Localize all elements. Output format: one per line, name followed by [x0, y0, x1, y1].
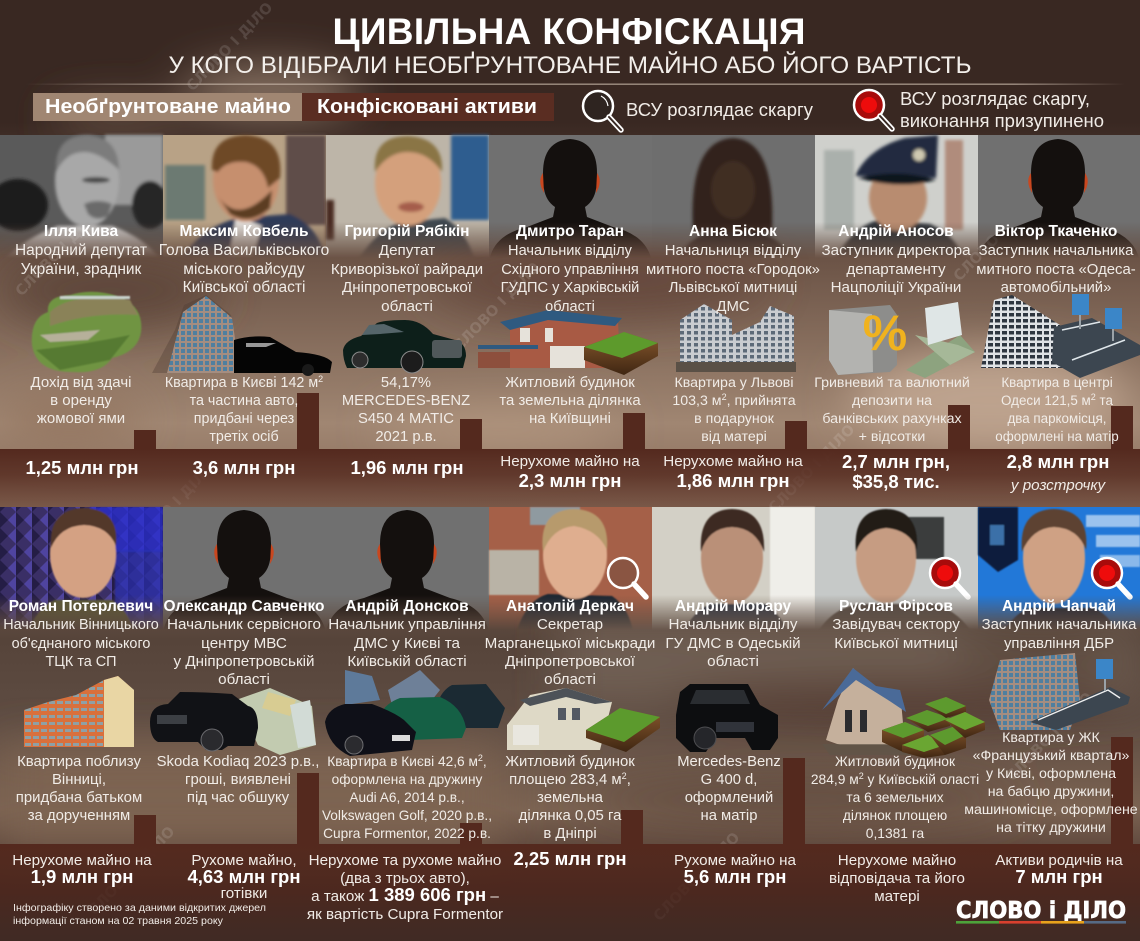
amount: Donskov: Нерухоме та рухоме майно: [309, 852, 501, 869]
watermarks: СЛОВО І ДІЛО: [951, 190, 1043, 285]
description: Derkach: Житловий будинок: [505, 754, 635, 770]
card text: Poterlevych: об'єднаного міського: [12, 636, 150, 652]
card text: Chapchai: [982, 598, 1137, 652]
description: Firsov: 0,1381 га: [866, 826, 925, 841]
photo: Andrii Chapchai: [978, 507, 1140, 637]
description: Tkachenko: та: [1096, 393, 1113, 408]
row 1 people: [15, 223, 1136, 315]
description: Kovbel: Квартира в Києві 142 м: [165, 375, 318, 391]
card text: Taran: Східного управління: [501, 262, 639, 278]
card text: Kyva: [15, 223, 147, 278]
description: Kovbel: придбані через: [194, 411, 295, 427]
asset: French Quarter apartment and parking: [989, 653, 1130, 730]
amount: Firsov: Нерухоме майно: [838, 852, 956, 869]
description: Savchenko: гроші, виявлені: [185, 772, 291, 788]
asset: Lviv apartment complex: [676, 304, 796, 372]
card text: Savchenko: області: [218, 671, 270, 688]
asset: Skoda Kodiaq and cash: [150, 688, 316, 755]
land plots: [882, 697, 985, 758]
legend: Supreme Court reviewing, enforcement suspended: виконання призупинено: [900, 111, 1104, 131]
legend: colour keys: [33, 93, 554, 121]
card text: Savchenko: центру МВС: [201, 635, 287, 652]
footnote: [13, 902, 266, 927]
amount: Morarui: 5,6 млн грн: [684, 866, 786, 887]
watermarks: СЛОВО І ДІЛО: [451, 260, 543, 355]
amount: Poterlevych: 1,9 млн грн: [31, 866, 133, 887]
description: Tkachenko: оформлені на матір: [995, 429, 1119, 444]
card text: Poterlevych: [3, 598, 159, 670]
card text: Savchenko: Олександр Савченко: [163, 598, 325, 615]
description: Tkachenko: [995, 375, 1119, 444]
description: Kyva: [31, 374, 131, 427]
amount: Morarui: Рухоме майно на: [674, 852, 797, 869]
card text: Derkach: Марганецької міськради: [485, 635, 655, 652]
description: Taran: на Київщині: [529, 411, 611, 427]
amount: Taran: Нерухоме майно на: [500, 453, 640, 470]
card text: Riabikin: області: [381, 298, 433, 315]
description: Firsov: 2: [859, 771, 864, 781]
card text: Bisiuk: Анна Бісюк: [689, 223, 777, 240]
card text: Anosov: департаменту: [846, 261, 946, 278]
description: Derkach: 2: [622, 771, 627, 781]
description: Firsov: ділянок площею: [843, 808, 947, 823]
card text: Kyva: Ілля Кива: [44, 223, 119, 240]
description: Tkachenko: Одеси 121,5 м: [1001, 393, 1091, 408]
photo: Viktor Tkachenko (silhouette): [977, 135, 1140, 265]
logo: СЛОВО і ДІЛО: [956, 898, 1126, 924]
watermarks: СЛОВО І ДІЛО: [766, 422, 858, 517]
description: Poterlevych: за дорученням: [28, 808, 130, 824]
card text: Anosov: Заступник директора: [821, 242, 971, 259]
asset: Odesa apartment and parking: [981, 294, 1140, 378]
description: Donskov: 2: [478, 753, 483, 763]
description: Derkach: земельна: [537, 790, 604, 806]
amount: Kovbel: 3,6 млн грн: [193, 457, 295, 478]
description: Tkachenko: 2: [1091, 392, 1096, 402]
row 1 amounts: [25, 451, 1109, 494]
amount: Savchenko: [187, 852, 301, 902]
asset: Vinnytsia apartment: [24, 676, 134, 747]
legend key: unjustified property: Необґрунтоване майно: [45, 96, 291, 118]
description: Poterlevych: Квартира поблизу: [17, 754, 141, 770]
card text: Derkach: [485, 598, 655, 688]
amount: Bisiuk: Нерухоме майно на: [663, 453, 803, 470]
icon: red magnifier badge: [1092, 558, 1130, 597]
description: Anosov: банківських рахунках: [822, 411, 962, 427]
description: Anosov: + відсотки: [859, 429, 925, 445]
amount: Donskov: як вартість Cupra Formentor: [307, 906, 503, 923]
amount: Donskov: [307, 852, 503, 923]
description: Chapchai: на бабцю дружини,: [988, 784, 1114, 800]
description: Donskov: [322, 753, 492, 841]
amount: Donskov: а також 1 389 606 грн –: [311, 884, 499, 905]
card text: Savchenko: у Дніпропетровській: [174, 653, 314, 670]
card text: Taran: Начальник відділу: [508, 243, 633, 259]
card text: Kovbel: Голова Васильківського: [159, 242, 329, 259]
description: Firsov: 284,9 м: [811, 772, 859, 787]
amount: Bisiuk: [663, 453, 803, 491]
description: Donskov: оформлена на дружину: [332, 772, 483, 787]
card text: Riabikin: Депутат: [379, 242, 435, 259]
band row 2 with stems: [0, 737, 1140, 941]
amount: Savchenko: готівки: [221, 885, 267, 902]
legend key: confiscated assets: Конфісковані активи: [317, 96, 537, 118]
photo: Andrii Morarui: [652, 507, 815, 637]
card text: Savchenko: Начальник сервісного: [167, 616, 321, 633]
card text: Kovbel: Максим Ковбель: [179, 223, 309, 240]
description: Kovbel: третіх осіб: [209, 429, 279, 445]
card text: Tkachenko: Заступник начальника: [979, 243, 1134, 259]
description: Bisiuk: [672, 375, 796, 445]
card text: Donskov: Начальник управління: [328, 616, 486, 633]
card text: Tkachenko: митного поста «Одеса-: [976, 262, 1136, 278]
legend: Supreme Court reviewing, enforcement suspended: ВСУ розглядає скаргу,: [900, 89, 1090, 109]
photo: Hryhorii Riabikin: [326, 135, 489, 265]
card text: Kyva: України, зрадник: [21, 261, 142, 278]
band row 1 with stems: [0, 393, 1140, 507]
photo: Andrii Anosov: [815, 135, 978, 265]
description: Kyva: в оренду: [50, 392, 112, 409]
card text: Derkach: Дніпропетровської: [505, 653, 636, 670]
description: Kyva: Дохід від здачі: [31, 374, 131, 391]
description: Kovbel: та частина авто,: [190, 393, 298, 409]
description: Morarui: [677, 754, 781, 824]
photo: Dmytro Taran (silhouette): [489, 135, 652, 265]
card text: Taran: Дмитро Таран: [516, 223, 624, 240]
description: Anosov: депозити на: [852, 393, 932, 409]
row 2 photos: [0, 507, 1140, 637]
legend key: unjustified property: [33, 93, 302, 121]
description: Poterlevych: Вінниці,: [52, 772, 106, 788]
asset: allotment land: [32, 292, 141, 372]
description: Donskov: Квартира в Києві 42,6 м: [327, 754, 478, 769]
card text: Riabikin: Дніпропетровської: [342, 279, 473, 296]
amount: Savchenko: Рухоме майно,: [191, 852, 297, 869]
description: Kovbel: 2: [318, 374, 323, 384]
card text: Chapchai: управління ДБР: [1004, 636, 1114, 652]
amount: Kyva: 1,25 млн грн: [25, 457, 139, 478]
amount: Tkachenko: 2,8 млн грн: [1007, 451, 1109, 472]
photo: Anna Bisiuk: [652, 135, 815, 265]
description: Poterlevych: [16, 754, 142, 824]
amount: Taran: 2,3 млн грн: [519, 470, 621, 491]
asset: Dnipro house and land: [507, 688, 660, 752]
description: Taran: Житловий будинок: [505, 375, 635, 391]
icon: magnifier white: [583, 91, 621, 130]
description: Morarui: на матір: [701, 808, 757, 824]
amount: Chapchai: [995, 852, 1123, 887]
photo: Maksym Kovbel: [163, 135, 326, 265]
asset: Kyiv apartment and three cars: [325, 670, 505, 756]
description: Taran: [499, 375, 641, 427]
card text: Derkach: Секретар: [537, 616, 603, 633]
card text: Donskov: ДМС у Києві та: [354, 635, 461, 652]
description: Donskov: ,: [483, 754, 487, 769]
description: Chapchai: на тітку дружини: [996, 820, 1106, 836]
card text: Donskov: Андрій Донсков: [345, 598, 469, 615]
amount: Tkachenko: у розстрочку: [1010, 477, 1106, 494]
asset: Kyiv apartment and car: [152, 295, 332, 376]
watermarks: СЛОВО І ДІЛО: [126, 460, 218, 555]
card text: Taran: області: [545, 299, 595, 315]
asset: safe, percent sign and money: %: [863, 305, 907, 361]
amount: Morarui: [674, 852, 797, 887]
amount: Firsov: [829, 852, 965, 905]
description: Tkachenko: Квартира в центрі: [1001, 375, 1113, 390]
icon: red magnifier badge: [930, 558, 968, 597]
watermarks: СЛОВО І ДІЛО: [13, 205, 105, 300]
description: Bisiuk: 103,3 м: [672, 393, 722, 409]
legend: Supreme Court reviewing: [583, 91, 813, 130]
asset: safe, percent sign and money: [829, 302, 975, 378]
description: Chapchai: [964, 730, 1138, 836]
card text: Poterlevych: Начальник Вінницького: [3, 617, 159, 633]
card text: Anosov: [821, 223, 971, 296]
legend key: confiscated assets: [302, 93, 554, 121]
description: Poterlevych: придбана батьком: [16, 790, 142, 806]
description: Morarui: G 400 d,: [701, 772, 757, 788]
card text: Anosov: Нацполіції України: [831, 279, 961, 296]
asset: Mercedes S450: [343, 320, 466, 373]
amount: Poterlevych: [12, 852, 152, 887]
watermarks: СЛОВО І ДІЛО: [1004, 690, 1096, 785]
description: Chapchai: у Києві, оформлена: [986, 766, 1116, 782]
description: Derkach: площею 283,4 м: [509, 772, 622, 788]
row 2 asset descriptions: [16, 730, 1138, 842]
description: Firsov: [811, 754, 979, 841]
amount: Firsov: матері: [874, 888, 920, 905]
amount: Poterlevych: Нерухоме майно на: [12, 852, 152, 869]
legend: Supreme Court reviewing, enforcement suspended: [854, 89, 1104, 131]
card text: Tkachenko: Віктор Ткаченко: [995, 223, 1117, 240]
footnote: інформації станом на 02 травня 2025 року: [13, 915, 224, 927]
card text: Poterlevych: ТЦК та СП: [46, 654, 116, 670]
description: Riabikin: 54,17%: [381, 375, 431, 391]
card text: Kovbel: [159, 223, 329, 296]
description: Riabikin: S450 4 MATIC: [358, 411, 454, 427]
card text: Anosov: Андрій Аносов: [838, 223, 954, 240]
card text: Bisiuk: Львівської митниці: [669, 280, 797, 296]
icon: magnifier red: [854, 90, 892, 129]
description: Chapchai: «Французький квартал»: [973, 748, 1130, 764]
card text: Chapchai: Андрій Чапчай: [1002, 598, 1116, 615]
description: Morarui: оформлений: [685, 790, 773, 806]
card text: Morarui: [665, 598, 801, 670]
amount: Tkachenko: [1007, 451, 1109, 494]
description: Donskov: Volkswagen Golf, 2020 р.в.,: [322, 808, 492, 823]
card text: Riabikin: [331, 223, 483, 315]
description: Morarui: Mercedes-Benz: [677, 754, 781, 770]
photo: Anatolii Derkach: [489, 507, 652, 637]
photo: Illia Kyva: [0, 135, 168, 265]
icon: white magnifier on Derkach: [608, 558, 646, 597]
subtitle: У КОГО ВІДІБРАЛИ НЕОБҐРУНТОВАНЕ МАЙНО АБО ЙОГО ВАРТІСТЬ: [168, 51, 972, 79]
photo: Andrii Donskov (silhouette): [326, 507, 489, 637]
description: Savchenko: Skoda Kodiaq 2023 р.в.,: [157, 754, 319, 770]
amount: Donskov: (два з трьох авто),: [340, 870, 470, 887]
card text: Morarui: ГУ ДМС в Одеській: [665, 635, 801, 652]
description: Savchenko: під час обшуку: [187, 790, 290, 806]
description: Firsov: у Київській оласті: [864, 772, 979, 787]
watermarks: СЛОВО І ДІЛО: [86, 824, 178, 919]
description: Derkach: ,: [627, 772, 631, 788]
card text: Firsov: Завідувач сектору: [832, 616, 960, 633]
description: Bisiuk: від матері: [701, 429, 767, 445]
row 2 amounts: [12, 848, 1123, 923]
card text: Firsov: Київської митниці: [834, 635, 958, 652]
card text: Riabikin: Григорій Рябікін: [344, 223, 470, 240]
description: Bisiuk: Квартира у Львові: [675, 375, 793, 391]
card text: Poterlevych: Роман Потерлевич: [9, 598, 153, 615]
description: Firsov: Житловий будинок: [835, 754, 956, 769]
description: Taran: та земельна ділянка: [499, 393, 641, 409]
card text: Bisiuk: [646, 223, 820, 315]
description: Chapchai: Квартира у ЖК: [1002, 730, 1101, 746]
card text: Bisiuk: митного поста «Городок»: [646, 262, 820, 278]
amount: Savchenko: 4,63 млн грн: [187, 866, 301, 887]
description: Bisiuk: 2: [722, 392, 727, 402]
asset: house and land plot: [478, 310, 658, 375]
card text: Tkachenko: [976, 223, 1136, 296]
description: Chapchai: машиномісце, оформлене: [964, 802, 1138, 818]
amount: Anosov: $35,8 тис.: [852, 471, 940, 492]
row 1 photos: [0, 135, 1140, 265]
card text: Bisiuk: ДМС: [716, 299, 750, 315]
description: Bisiuk: в подарунок: [694, 411, 775, 427]
photo: Roman Poterlevych: [0, 507, 163, 637]
watermarks: СЛОВО І ДІЛО: [184, 0, 276, 95]
card text: Kovbel: міського райсуду: [183, 261, 305, 278]
card text: Taran: [501, 223, 639, 315]
card text: Kovbel: Київської області: [183, 279, 305, 296]
amount: Derkach: 2,25 млн грн: [513, 848, 627, 869]
card text: Savchenko: [163, 598, 325, 688]
legend: Supreme Court reviewing: ВСУ розглядає скаргу: [626, 100, 813, 120]
description: Riabikin: MERCEDES-BENZ: [342, 393, 470, 409]
description: Riabikin: [342, 375, 470, 445]
description: Riabikin: 2021 р.в.: [375, 429, 437, 445]
card text: Chapchai: Заступник начальника: [982, 617, 1137, 633]
land plot: [584, 332, 658, 375]
amount: Bisiuk: 1,86 млн грн: [676, 470, 790, 491]
amount: Anosov: 2,7 млн грн,: [842, 451, 950, 472]
description: Derkach: [505, 754, 635, 842]
amount: Anosov: [842, 451, 950, 492]
card text: Donskov: [328, 598, 486, 670]
photo: Oleksandr Savchenko (silhouette): [163, 507, 326, 637]
amount: Firsov: відповідача та його: [829, 870, 965, 887]
description: Tkachenko: два паркомісця,: [1007, 411, 1107, 426]
title: ЦИВІЛЬНА КОНФІСКАЦІЯ: [332, 11, 806, 52]
watermarks: СЛОВО І ДІЛО: [651, 830, 743, 925]
card text: Tkachenko: автомобільний»: [1001, 280, 1111, 296]
card text: Derkach: області: [544, 671, 596, 688]
card text: Bisiuk: Начальниця відділу: [665, 243, 802, 259]
photo: Ruslan Firsov: [815, 507, 978, 637]
card text: Kyva: Народний депутат: [15, 242, 147, 259]
row 1 asset descriptions: [31, 374, 1119, 445]
card text: Derkach: Анатолій Деркач: [506, 598, 634, 615]
row 2 people: [3, 598, 1137, 688]
description: Derkach: ділянка 0,05 га: [519, 808, 622, 824]
card text: Riabikin: Криворізької райради: [331, 261, 483, 278]
description: Savchenko: [157, 754, 319, 806]
description: Donskov: Cupra Formentor, 2022 р.в.: [323, 826, 491, 841]
card text: Donskov: Київській області: [347, 653, 467, 670]
description: Kovbel: [165, 374, 323, 445]
description: Anosov: [814, 375, 970, 445]
asset: Kyiv oblast house and six plots: [822, 668, 985, 758]
description: Firsov: та 6 земельних: [846, 790, 944, 805]
description: Donskov: Audi A6, 2014 р.в.,: [349, 790, 465, 805]
card text: Firsov: Руслан Фірсов: [839, 598, 953, 615]
asset: Mercedes G400d: [676, 684, 778, 752]
amount: Chapchai: 7 млн грн: [1015, 866, 1103, 887]
description: Derkach: в Дніпрі: [543, 826, 597, 842]
amount: Taran: [500, 453, 640, 491]
amount: Riabikin: 1,96 млн грн: [350, 457, 464, 478]
card text: Taran: ГУДПС у Харківській: [501, 280, 639, 296]
description: Kyva: жомової ями: [37, 410, 125, 427]
land plot: [586, 708, 660, 752]
card text: Firsov: [832, 598, 960, 652]
card text: Morarui: області: [707, 653, 759, 670]
footnote: Інфографіку створено за даними відкритих джерел: [13, 902, 266, 914]
amount: Chapchai: Активи родичів на: [995, 852, 1123, 869]
card text: Morarui: Начальник відділу: [669, 616, 798, 633]
description: Bisiuk: , прийнята: [727, 393, 796, 409]
card text: Morarui: Андрій Морару: [675, 598, 792, 615]
description: Anosov: Гривневий та валютний: [814, 375, 970, 391]
